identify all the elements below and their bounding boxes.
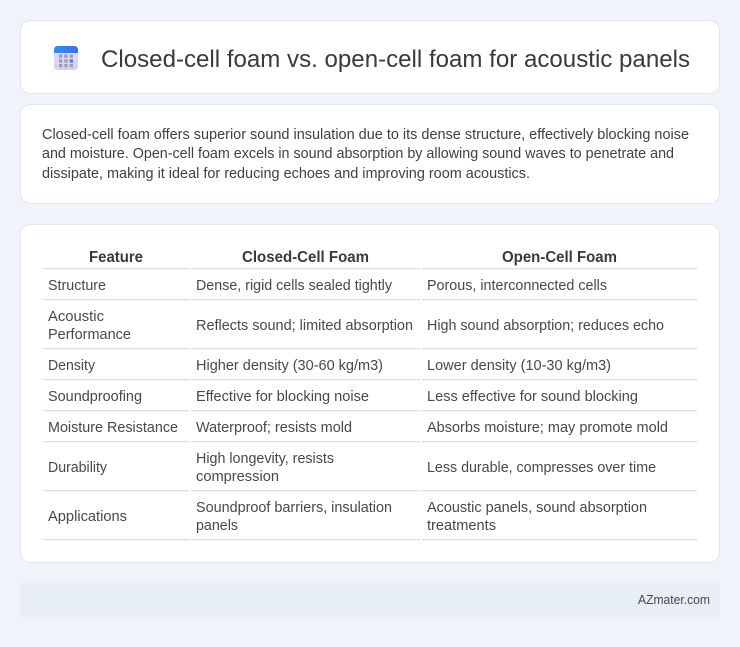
text block: introduction	[42, 127, 689, 182]
panel: title card	[20, 20, 720, 94]
row: acoustic performance: Performance	[48, 327, 131, 343]
row: density: Density	[48, 358, 96, 374]
footer source text: AZmater.com	[638, 592, 710, 607]
row: acoustic performance: Acoustic	[48, 309, 104, 325]
row: applications: panels	[196, 518, 238, 534]
row: density	[48, 358, 611, 374]
row: soundproofing: Soundproofing	[48, 389, 142, 405]
row: applications: treatments	[427, 518, 496, 534]
row: durability: Durability	[48, 460, 108, 476]
text block: introduction: Closed-cell foam offers superior sound insulation due to its dense structure, effectively blocking noise	[42, 127, 689, 143]
row: density: Lower density (10-30 kg/m3)	[427, 358, 611, 374]
row: soundproofing	[48, 389, 638, 405]
row: acoustic performance: Reflects sound; limited absorption	[196, 318, 413, 334]
panel: comparison table	[20, 224, 720, 562]
table header: Open-Cell Foam	[502, 249, 617, 266]
row: density: Higher density (30-60 kg/m3)	[196, 358, 383, 374]
footer	[20, 583, 720, 617]
row: moisture resistance: Moisture Resistance	[48, 420, 178, 436]
row: applications: Soundproof barriers, insulation	[196, 500, 392, 516]
row: applications: Acoustic panels, sound absorption	[427, 500, 647, 516]
row: durability	[48, 451, 656, 485]
row: soundproofing: Effective for blocking noise	[196, 389, 369, 405]
row: durability: Less durable, compresses over time	[427, 460, 656, 476]
panel: introduction	[20, 104, 720, 204]
row: durability: compression	[196, 469, 279, 485]
icon: calendar	[54, 46, 78, 70]
row: structure: Dense, rigid cells sealed tightly	[196, 278, 393, 294]
text block: introduction: dissipate, making it ideal for reducing echoes and improving room acoustics.	[42, 166, 530, 182]
row: applications	[48, 500, 647, 534]
row: structure	[48, 278, 607, 294]
row: moisture resistance: Absorbs moisture; may promote mold	[427, 420, 668, 436]
row: moisture resistance	[48, 420, 668, 436]
row: acoustic performance	[48, 309, 664, 343]
row: structure: Porous, interconnected cells	[427, 278, 607, 294]
row: acoustic performance: High sound absorption; reduces echo	[427, 318, 664, 334]
table header: Closed-Cell Foam	[242, 249, 369, 266]
title: Closed-cell foam vs. open-cell foam for acoustic panels	[101, 46, 690, 73]
table header	[89, 249, 617, 266]
row: soundproofing: Less effective for sound blocking	[427, 389, 638, 405]
row: structure: Structure	[48, 278, 106, 294]
row: moisture resistance: Waterproof; resists mold	[196, 420, 352, 436]
row: applications: Applications	[48, 509, 127, 525]
table header: Feature	[89, 249, 143, 266]
row: durability: High longevity, resists	[196, 451, 334, 467]
text block: introduction: and moisture. Open-cell foam excels in sound absorption by allowing sound waves to penetrate and	[42, 146, 674, 162]
